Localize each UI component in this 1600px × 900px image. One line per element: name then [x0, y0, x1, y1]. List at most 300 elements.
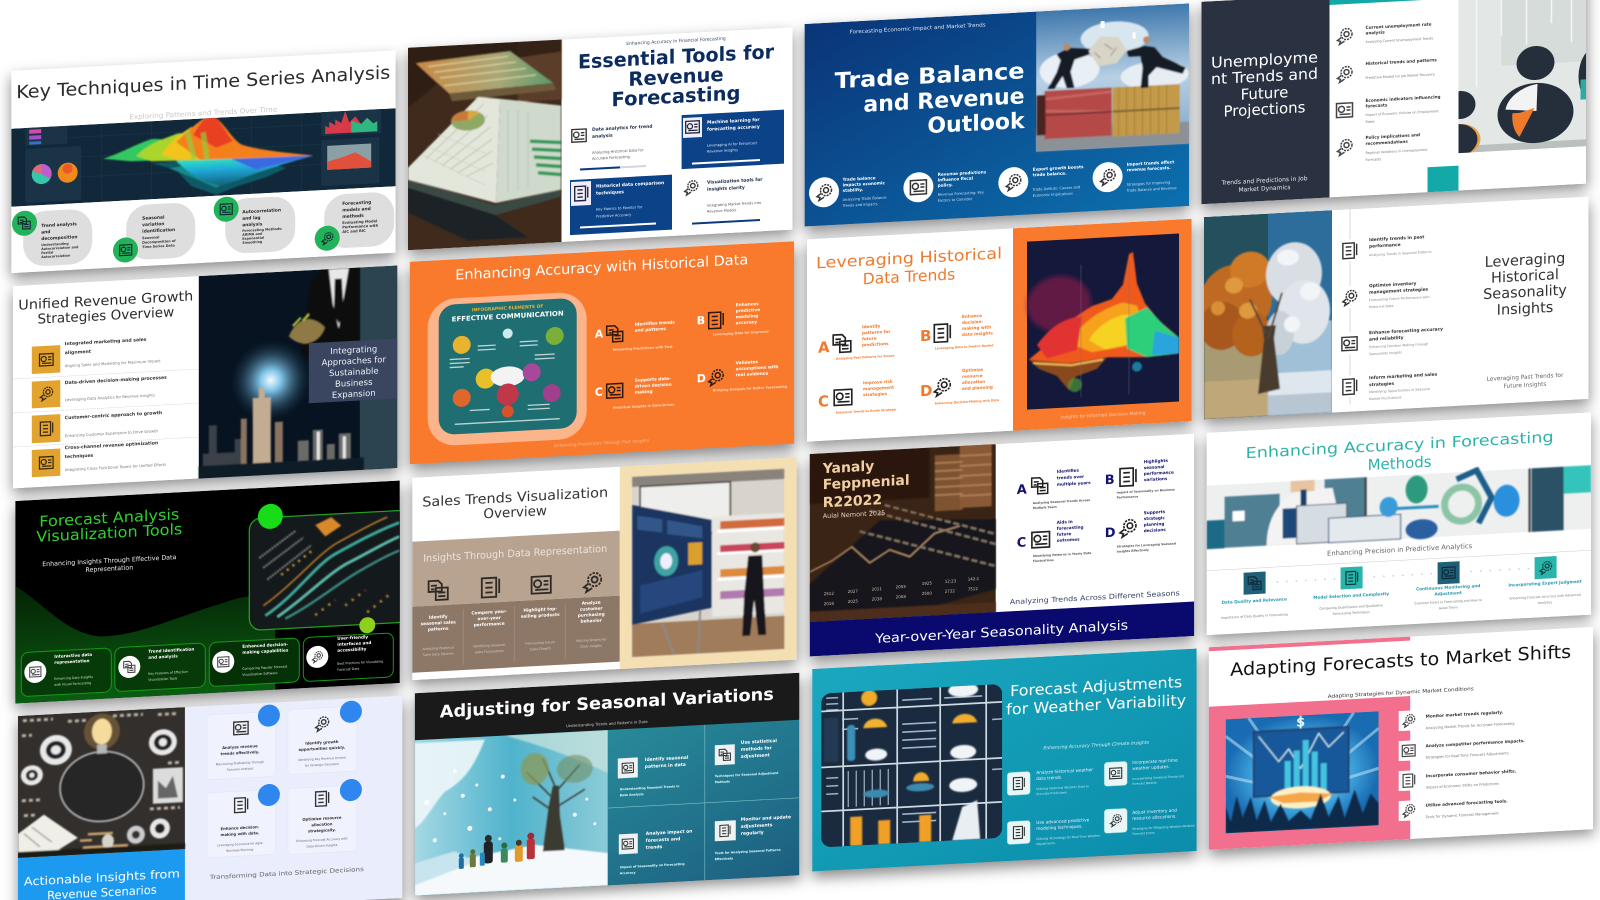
card: optimize resource: Enhancing Forecast Accuracy with [296, 836, 348, 843]
list of four items: Rates [1366, 120, 1375, 124]
brown band with four columns: purchasing [578, 611, 605, 619]
item C: future [1057, 531, 1072, 537]
step: expert judgment [1509, 555, 1582, 607]
item A: A [1017, 482, 1027, 498]
brown band with four columns: performance [474, 621, 505, 628]
list of four items: Regional Variations in Unemployment [1366, 148, 1428, 155]
brown band with four columns: Compare year- [471, 609, 507, 617]
item: integrated marketing: Aligning Sales and Marketing for Maximum Impact [65, 358, 161, 368]
subtitle: Representation [85, 564, 133, 574]
brown band with four columns: Forecasting Future [525, 640, 555, 646]
item C: Improve risk [863, 379, 893, 385]
subtitle: Enhancing Insights Through Effective Data [42, 554, 177, 568]
brown band with four columns: patterns [428, 626, 449, 633]
item C: Fluctuations [1033, 558, 1054, 563]
item D [1105, 508, 1176, 554]
item: customer-centric [32, 409, 162, 443]
item: optimize inventory [1340, 280, 1430, 311]
list of four items [1336, 21, 1441, 164]
item: revenue predictions: Factors to Consider [938, 197, 973, 203]
slide: Forecast Analysis Visualization Tools [15, 480, 409, 704]
card: machine learning [682, 110, 784, 169]
card: user-friendly: Forecast Data [337, 667, 359, 672]
list of four items: Forecasts [1366, 157, 1381, 162]
item: optimize inventory: Optimize inventory [1369, 281, 1416, 289]
orange panel with mound image: Insights for Informed Decision Making [1060, 410, 1146, 421]
item A: Analyzing Seasonal Trends Across [1033, 498, 1090, 505]
bubble: trend analysis: Understanding [41, 242, 69, 247]
item: data-driven decisions: Data-driven decision-making processes [65, 375, 167, 386]
item: monitor adjustments: Tools for Analyzing Seasonal Patterns [715, 848, 781, 855]
item: monitor adjustments [715, 814, 791, 861]
image: coins and chart on wood: 2732 [945, 588, 955, 594]
title bar [415, 673, 799, 740]
bubble: seasonal variation: Seasonal [142, 235, 159, 240]
item A: A [818, 338, 830, 357]
card: identify growth: Identify growth [305, 739, 339, 746]
item: data-driven decisions [32, 374, 167, 408]
card: interactive data [21, 648, 111, 697]
note: Analyzing Trends Across Different Seasons [1010, 589, 1180, 606]
title [580, 44, 774, 106]
item B: Enhance [962, 313, 982, 319]
card: data analytics: Analyzing Historical Data for [592, 148, 644, 155]
blue title block: Actionable Insights from [24, 866, 180, 889]
item A: Multiple Years [1033, 505, 1057, 510]
item C: management [863, 385, 894, 391]
embedded infographic: EFFECTIVE COMMUNICATION [452, 309, 564, 323]
item: analyze weather: data trends. [1036, 775, 1062, 782]
bubble: forecasting models: methods [342, 213, 364, 220]
card: enhance decision-making: Enhance decision- [221, 824, 260, 831]
item: competitor performance: Analyze competitor performance impacts. [1426, 738, 1525, 748]
image: coins and chart on wood: 2038 [872, 596, 882, 602]
card: identify growth: Identifying Key Revenue Drivers [298, 755, 346, 762]
step: continuous monitoring: Adjustment [1435, 590, 1462, 597]
bubble: seasonal variation: Time Series Data [142, 243, 175, 249]
step: expert judgment: Enhancing Forecast Accuracy with Advanced [1509, 593, 1581, 601]
item A: and patterns [635, 326, 666, 334]
step: expert judgment: Analytics [1538, 600, 1553, 605]
image: coins and chart on wood: 1925 [922, 580, 932, 586]
card: trend identification [115, 643, 205, 692]
bubble: forecasting models: Forecasting [342, 200, 371, 207]
item: real-time weather: weather updates. [1132, 764, 1170, 772]
card: analyze revenue: Scenario Analysis [227, 766, 254, 772]
card: optimize resource: Optimize resource [302, 815, 342, 822]
tan band with subtitle and icons [412, 531, 620, 607]
item C: C [595, 385, 603, 399]
item: advanced tools: Utilize advanced forecasting tools. [1426, 798, 1508, 808]
card: enhanced decision-making: Visualization Software [242, 671, 278, 677]
card: machine learning: Revenue Insights [707, 148, 738, 154]
brown band with four columns: Analyze [582, 600, 601, 607]
title [834, 65, 1025, 133]
image: executive and skyline [199, 266, 397, 479]
card: interactive data: with Visual Forecasting [54, 681, 91, 687]
item: export growth: Economic Implications [1033, 192, 1073, 198]
item: cross-channel: Integrating Cross-Functional Teams for Unified Efforts [65, 462, 166, 472]
image: weather icon grid [821, 681, 1002, 848]
item: customer-centric: Customer-centric approach to growth [65, 410, 162, 421]
item: export growth: Trade Deficits: Causes and [1032, 185, 1080, 192]
card: optimize resource: strategically. [308, 827, 336, 834]
slide: Leveraging Historical Seasonality Insights [1200, 197, 1588, 420]
item: enhance forecasting [1340, 326, 1443, 358]
image: coins and chart on wood: 2055 [896, 584, 906, 589]
item: inform marketing: strategies [1369, 381, 1395, 388]
item: advanced tools [1399, 795, 1508, 821]
card: enhance decision-making: making with data. [220, 830, 260, 837]
bubble: autocorrelation [214, 193, 295, 255]
slide: Trade Balance and Revenue Outlook [805, 4, 1189, 226]
item: export growth: trade balance. [1033, 171, 1067, 177]
item: monitor adjustments: Monitor and update [741, 814, 791, 823]
subtitle: Leveraging Past Trends for [1487, 373, 1564, 383]
item D: D [920, 382, 932, 400]
bubble: autocorrelation: Exponential [242, 236, 264, 241]
slide: Unemployment Trends and Future Projections [1202, 0, 1600, 204]
accent circle small [359, 617, 375, 634]
item: identify seasonal: Understanding Seasonal Trends in [620, 784, 679, 791]
title [1483, 251, 1567, 320]
card: data analytics [572, 124, 653, 171]
bubble: trend analysis [12, 207, 92, 268]
bubble: forecasting models: AIC and BIC [342, 229, 366, 234]
title: and Revenue [863, 84, 1025, 118]
callout: integrating approaches: Expansion [332, 389, 376, 401]
item D: Supports [1144, 509, 1166, 515]
item: inform marketing: Identifying Opportunities in Seasonal [1369, 387, 1430, 394]
image title: Feppnenial [823, 473, 910, 493]
image title [822, 457, 910, 511]
item D: Enhancing Decision-Making with Data [935, 398, 999, 405]
item: statistical methods: adjustment [741, 752, 771, 760]
item B [697, 301, 769, 337]
item: import trends: revenue forecasts. [1127, 165, 1171, 172]
item D: D [1105, 526, 1116, 541]
step: continuous monitoring [1415, 560, 1482, 612]
item: identify trends: Identify trends in past [1369, 234, 1424, 243]
card: visualization tools [685, 177, 763, 225]
step: model selection: Comparing Quantitative and Qualitative [1319, 603, 1383, 611]
item B: B [1105, 473, 1115, 488]
item: identify seasonal [618, 755, 689, 797]
subtitle: Future Insights [1504, 382, 1546, 390]
title: Sales Trends Visualization [422, 485, 608, 511]
title [36, 505, 182, 546]
item: optimize inventory: Historical Data [1369, 304, 1393, 309]
item B: Enhances [736, 301, 759, 308]
list of four items: Current unemployment rate [1366, 22, 1432, 30]
step: expert judgment: Incorporating Expert Judgment [1509, 579, 1582, 588]
item: export growth: Export growth boosts [1033, 164, 1084, 172]
image: rainbow data dashboard [11, 106, 396, 207]
card: historical comparison [570, 175, 672, 235]
image: crowd and rising chart: $ [1296, 715, 1305, 731]
bubble: forecasting models [315, 191, 394, 251]
item B: seasonal [1144, 464, 1165, 470]
card: historical comparison: Predictive Accuracy [596, 213, 632, 219]
item C: making [635, 389, 653, 396]
card: enhanced decision-making: Enhanced decision- [242, 641, 288, 649]
item C: C [818, 392, 829, 411]
footer: Enhancing Predictions Through Past Insights [554, 438, 650, 449]
item: predictive modeling: Adjustments [1036, 841, 1055, 846]
item: analyze impact [619, 829, 692, 875]
item: real-time weather [1104, 757, 1184, 787]
callout: integrating approaches: Business [335, 378, 373, 390]
item C [595, 376, 675, 411]
step: data quality [1221, 570, 1288, 620]
card: analyze revenue: Maximizing Profitability Through [216, 760, 264, 766]
item A: trends over [1057, 474, 1085, 480]
item: inform marketing [1340, 371, 1438, 403]
card: visualization tools: Revenue Models [707, 208, 737, 214]
item: analyze impact: Impact of Seasonality on Forecasting [620, 862, 685, 869]
image panel: analyst at digital display [620, 457, 797, 669]
teal accents [1330, 0, 1458, 197]
item D: resource [962, 373, 983, 379]
step: model selection: Model Selection and Complexity [1313, 591, 1389, 600]
left title panel: Trends and Predictions in Job [1220, 175, 1308, 187]
bubble: forecasting models: Evaluating Model [342, 219, 377, 225]
item: adjust inventory: resource allocations. [1132, 814, 1177, 822]
item B: Performance [1117, 494, 1138, 500]
item: integrated marketing: alignment [65, 349, 92, 356]
card: identify growth [288, 700, 362, 775]
item: cross-channel [32, 440, 166, 477]
item: identify trends: performance [1369, 242, 1401, 250]
item: import trends: Import trends affect [1127, 159, 1174, 167]
image: crowd and rising chart [1226, 711, 1379, 833]
item: revenue predictions [903, 170, 986, 202]
image: coins and chart on wood [810, 442, 996, 622]
bubble: autocorrelation: Smoothing [242, 240, 263, 245]
item A: multiple years [1057, 480, 1091, 487]
item: adjust inventory [1104, 805, 1194, 837]
card: interactive data: representation [54, 658, 90, 665]
item: import trends [1092, 160, 1176, 192]
item B: decision- [962, 319, 984, 325]
item: statistical methods: methods for [741, 745, 772, 753]
item B: modeling [736, 313, 758, 320]
item D: Optimize [962, 367, 983, 373]
title: Revenue [628, 63, 724, 91]
item: inform marketing: Market Fluctuations [1369, 395, 1402, 401]
title [422, 485, 608, 526]
step: continuous monitoring: Common Errors in Forecasting and How to [1415, 598, 1482, 606]
card: data analytics: Accurate Forecasting [592, 155, 630, 161]
image: autumn and winter tree [1200, 210, 1332, 420]
step: model selection [1313, 565, 1389, 617]
item: integrated marketing [32, 336, 161, 374]
item A [818, 323, 894, 362]
item: revenue predictions: influence fiscal [938, 175, 974, 182]
bubble: trend analysis: Trend analysis [41, 221, 77, 229]
title [816, 244, 1002, 291]
brown band with four columns: customer [580, 606, 603, 613]
title: Visualization Tools [36, 520, 182, 546]
item C: driven decision [635, 382, 672, 390]
subtitle [1487, 373, 1564, 391]
item D [697, 358, 788, 393]
image: coins and chart on wood: 2011 [872, 586, 882, 592]
bubble: seasonal variation: variation [142, 221, 164, 228]
slide: Adjusting for Seasonal Variations [415, 673, 799, 896]
image: coins and chart on wood: 2018 [824, 601, 834, 606]
item: enhance forecasting: Seasonality Insights [1369, 350, 1402, 356]
item D: D [697, 372, 706, 385]
item B: B [697, 314, 705, 327]
item B: B [920, 327, 931, 345]
slide: Enhancing Accuracy with Historical Data [410, 241, 794, 464]
item C [818, 379, 897, 416]
item C: Aids in [1057, 519, 1073, 525]
item A [595, 320, 675, 353]
title: Strategies Overview [37, 304, 174, 328]
item: identify trends [1340, 234, 1432, 262]
list of four items: Historical trends and patterns [1366, 57, 1437, 66]
item C [1017, 518, 1091, 564]
item D: allocation [962, 379, 985, 385]
item: revenue predictions: Revenue predictions [938, 169, 987, 177]
item: cross-channel: Cross-channel revenue optimization [65, 440, 158, 451]
slide: Year-over-Year Seasonality Analysis [810, 432, 1194, 656]
card: trend identification: and analysis [148, 653, 178, 660]
slide: Sales Trends Visualization Overview [412, 457, 797, 680]
item A: future [862, 336, 877, 341]
card: enhance decision-making [207, 783, 280, 858]
item B: Leveraging Data for Improved [713, 330, 769, 337]
item: trade balance: Analyzing Trade Balance [843, 196, 887, 202]
list of four items: analysis [1366, 30, 1385, 36]
item A: Identifies trends [635, 320, 675, 328]
brown band with four columns: Highlight top- [523, 606, 557, 614]
green wave background [15, 572, 275, 704]
item: predictive modeling: modeling techniques. [1036, 824, 1083, 832]
slide: Key Techniques in Time Series Analysis [11, 50, 396, 273]
left title panel: Future [1241, 83, 1288, 104]
brown band with four columns: behavior [581, 618, 603, 625]
brown band with four columns: seasonal sales [421, 619, 456, 627]
item: adjust inventory: Forecast Errors [1132, 831, 1155, 836]
title: Leveraging Historical [816, 244, 1002, 272]
card: visualization tools: Integrating Market Trends into [707, 201, 761, 208]
step: data quality: Importance of Data Quality in Forecasting [1221, 612, 1288, 620]
title: for Weather Variability [1006, 691, 1186, 719]
item C: outcomes [1057, 537, 1080, 543]
slide: Enhancing Accuracy in Forecasting Methods [1207, 412, 1591, 635]
item B: performance [1144, 470, 1174, 476]
title: Methods [1368, 453, 1432, 474]
item: enhance forecasting: Enhance forecasting accuracy [1369, 326, 1443, 336]
orange panel with mound image [1013, 219, 1192, 431]
item: analyze impact: trends [646, 844, 663, 851]
title [1246, 428, 1554, 481]
list of four items: Impact of Economic Policies on Employment [1366, 109, 1439, 117]
item: real-time weather: Forecast Models [1132, 781, 1157, 786]
brown band with four columns: over-year [478, 615, 502, 622]
bubble: autocorrelation: ARIMA and [242, 232, 263, 237]
brown band with four columns: Clear Insights [580, 644, 602, 649]
item: predictive modeling [1007, 817, 1101, 848]
title [20, 290, 192, 324]
card: trend identification: Key Features of Effective [148, 670, 188, 676]
accent circle large [258, 503, 283, 530]
item D: planning [1144, 521, 1164, 527]
brown band with four columns: Identify [429, 614, 448, 621]
item: optimize inventory: Forecasting Future Performance with [1369, 295, 1430, 302]
slide: Unified Revenue Growth Strategies Overview [13, 266, 397, 489]
list of four items: recommendations [1366, 139, 1408, 146]
title [1006, 673, 1186, 719]
step: model selection: Forecasting Techniques [1333, 610, 1370, 616]
item A: predictions [862, 341, 889, 347]
card: user-friendly [303, 633, 393, 682]
card: trend identification: Visualization Tools [148, 676, 178, 682]
card: analyze revenue: trends effectively. [221, 749, 260, 756]
title: Essential Tools for [578, 40, 774, 74]
item: analyze weather: Accurate Predictions [1036, 790, 1067, 796]
item D: Insights Effectively [1117, 548, 1149, 554]
item: consumer behavior [1399, 765, 1517, 791]
card: machine learning: Machine learning for [707, 117, 760, 126]
card: enhance decision-making: Business Planning [226, 847, 254, 853]
item: trade balance: stability. [843, 187, 864, 193]
card: user-friendly: Best Practices for Visualizing [337, 659, 383, 666]
title: Key Techniques in Time Series Analysis [16, 63, 390, 103]
image card: data streams [249, 510, 409, 631]
bubble: trend analysis: decomposition [41, 234, 78, 242]
title: Forecasting [612, 81, 740, 111]
subtitle [42, 554, 177, 576]
item A: Analyzing Past Patterns for Future [836, 354, 894, 361]
image: winter scene with people [415, 730, 608, 896]
image: open ledger on desk [408, 40, 562, 250]
item C: forecasting [1057, 524, 1084, 531]
item: import trends: Trade Balance and Revenue [1126, 186, 1177, 193]
card: machine learning: Leveraging AI for Enhanced [707, 141, 757, 148]
item: adjust inventory: Strategies for Mitigating Weather-Related [1132, 824, 1194, 831]
image: coins and chart on wood: 2025 [848, 598, 858, 604]
left title panel: nt Trends and [1211, 65, 1318, 88]
title: Data Trends [863, 265, 955, 288]
card: identify growth: for Strategic Decisions [305, 762, 339, 768]
item: identify seasonal: patterns in data [645, 762, 686, 770]
bubble: trend analysis: Autocorrelation and [41, 245, 79, 251]
brown band with four columns: Analyzing Historical [422, 645, 454, 651]
bubble: autocorrelation: and lag [242, 215, 261, 222]
image: coins and chart on wood: 2008 [896, 594, 906, 599]
title: Forecast Adjustments [1010, 673, 1182, 700]
image: coins and chart on wood: 7512 [968, 586, 978, 592]
card: enhanced decision-making: making capabilities [242, 647, 289, 655]
item: export growth [998, 165, 1084, 198]
bottom banner: Year-over-Year Seasonality Analysis [874, 619, 1128, 647]
item D: assumptions with [736, 364, 778, 372]
card: identify growth: opportunities quickly. [299, 745, 346, 752]
item: data-driven decisions: Leveraging Data Analytics for Revenue Insights [65, 392, 155, 402]
title: Enhancing Accuracy with Historical Data [455, 252, 748, 284]
item: monitor adjustments: regularly [741, 830, 764, 837]
tan band with subtitle and icons: Insights Through Data Representation [423, 544, 607, 565]
item A [1017, 467, 1091, 511]
item D: Strategies for Leveraging Seasonal [1117, 541, 1176, 549]
title: Historical [1491, 267, 1559, 287]
item: analyze impact: Analyze impact on [646, 829, 692, 837]
item B [920, 312, 994, 351]
